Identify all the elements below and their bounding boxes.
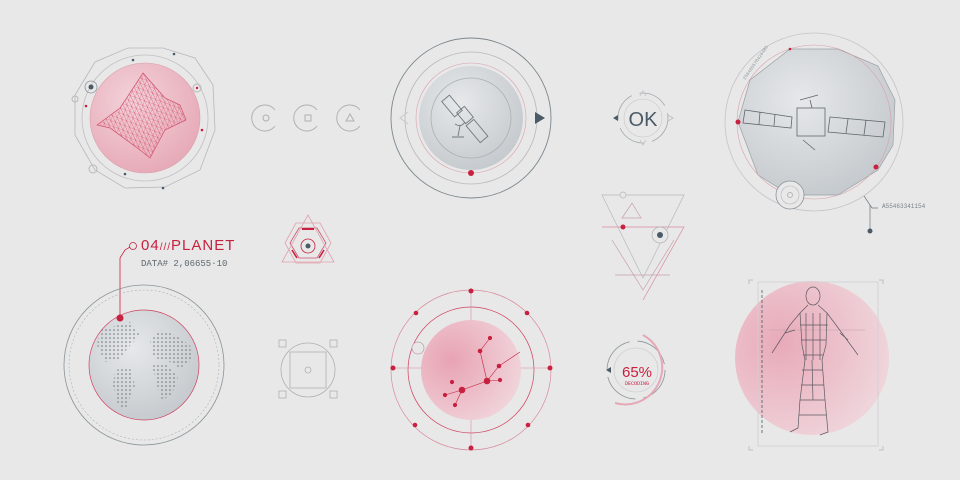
panel: satellite wireframe circle: 256465578426485 — [742, 44, 770, 81]
icon: satellite — [442, 95, 488, 143]
icon: wireframe mountain — [97, 73, 186, 158]
icon: satellite drawing — [743, 95, 885, 150]
icon: dotted world map — [97, 322, 192, 410]
panel: satellite dial — [391, 38, 551, 198]
panel: globe — [64, 242, 224, 445]
panel: OK button — [613, 91, 673, 145]
panel: 65% decoding gauge: DECODING — [625, 381, 649, 387]
panel: 65% decoding gauge — [606, 335, 665, 404]
icon: wireframe human figure — [772, 287, 858, 435]
icon: hexagon target — [282, 215, 334, 263]
heading: 04 planet — [141, 237, 235, 269]
panel: satellite wireframe circle — [725, 33, 926, 234]
panel: network sphere — [390, 288, 552, 450]
panel: triangles — [602, 192, 684, 300]
label: serial number: A55463341154 — [882, 203, 926, 210]
heading: 04 planet: DATA# 2,06655·10 — [141, 259, 227, 269]
panel: human body scan — [735, 280, 889, 450]
panel: 65% decoding gauge: 65% — [622, 364, 652, 381]
icon: square target — [279, 340, 337, 398]
icon: three small dials — [252, 105, 360, 131]
heading: 04 planet: 04///PLANET — [141, 237, 235, 254]
panel: mountain wireframe scanner — [72, 48, 215, 189]
chart: node network — [443, 336, 520, 407]
panel: OK button: OK — [629, 109, 658, 131]
